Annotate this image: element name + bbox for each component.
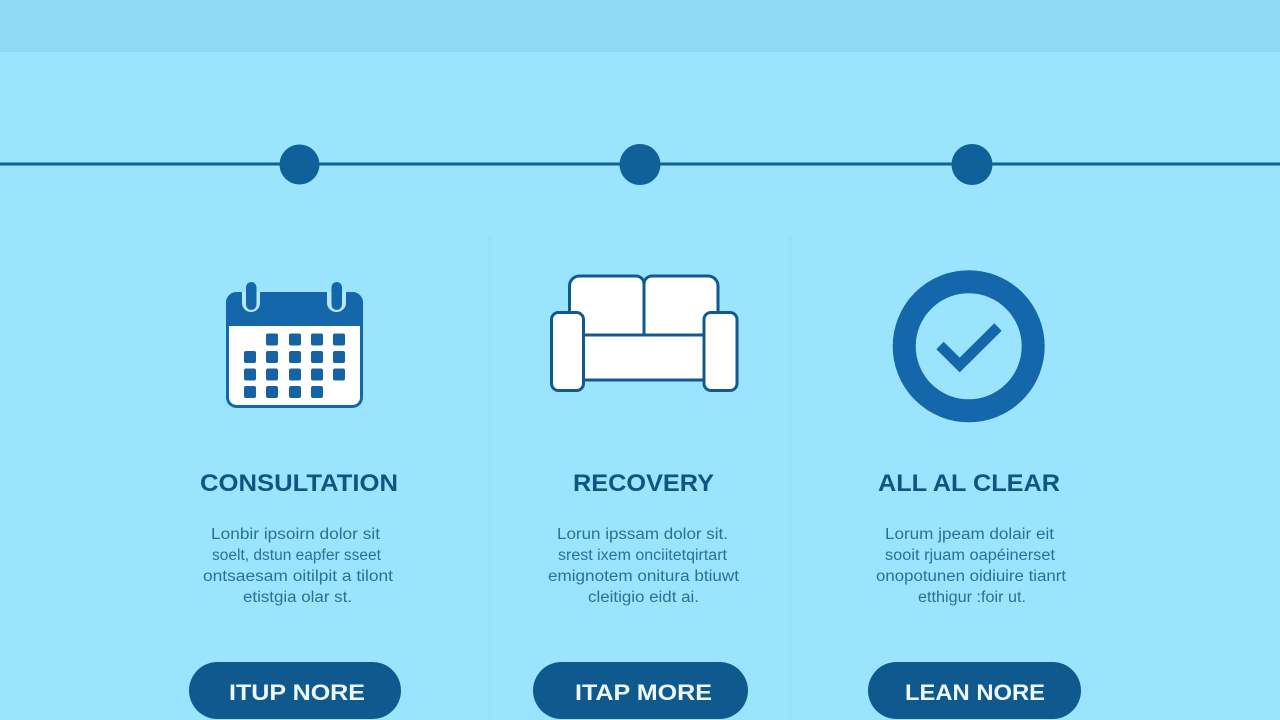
- heading: all clear: ALL AL CLEAR: [878, 470, 1060, 497]
- button: recovery: [533, 662, 748, 719]
- body text: recovery: cleitigio eidt ai.: [588, 589, 699, 606]
- top band: [0, 0, 1280, 52]
- body text: all clear: Lorum jpeam dolair eit: [885, 526, 1055, 543]
- button: consultation: [189, 662, 401, 719]
- body text: recovery: srest ixem onciitetqirtart: [558, 547, 728, 564]
- body text: all clear: etthigur :foir ut.: [918, 589, 1026, 606]
- heading: consultation: CONSULTATION: [200, 470, 398, 497]
- body text: all clear: sooit rjuam oapéinerset: [885, 547, 1056, 564]
- body text: consultation: Lonbir ipsoirn dolor sit: [211, 526, 381, 543]
- button: all clear: [868, 662, 1081, 719]
- button: all clear: LEAN NORE: [905, 680, 1045, 705]
- marker: step 2: [620, 144, 660, 185]
- heading: recovery: RECOVERY: [573, 470, 714, 497]
- button: consultation: ITUP NORE: [229, 680, 365, 705]
- body text: recovery: Lorun ipssam dolor sit.: [557, 526, 728, 543]
- panel: recovery: [533, 276, 748, 719]
- button: recovery: ITAP MORE: [575, 680, 712, 705]
- body text: recovery: emignotem onitura btiuwt: [548, 568, 740, 585]
- body text: consultation: soelt, dstun eapfer sseet: [212, 547, 382, 564]
- body text: all clear: [876, 526, 1067, 606]
- icon: calendar: [226, 282, 363, 406]
- marker: step 1: [280, 144, 320, 184]
- icon: sofa: [552, 276, 737, 390]
- panel: consultation: [189, 282, 401, 719]
- body text: consultation: etistgia olar st.: [243, 589, 352, 606]
- body text: all clear: onopotunen oidiuire tianrt: [876, 568, 1067, 585]
- body text: consultation: ontsaesam oitilpit a tilont: [203, 568, 394, 585]
- body text: consultation: [203, 526, 394, 606]
- panel: all clear: [868, 282, 1081, 719]
- marker: step 3: [952, 144, 992, 185]
- icon: check circle: [904, 282, 1033, 411]
- body text: recovery: [548, 526, 740, 606]
- timeline with step markers: [0, 144, 1280, 185]
